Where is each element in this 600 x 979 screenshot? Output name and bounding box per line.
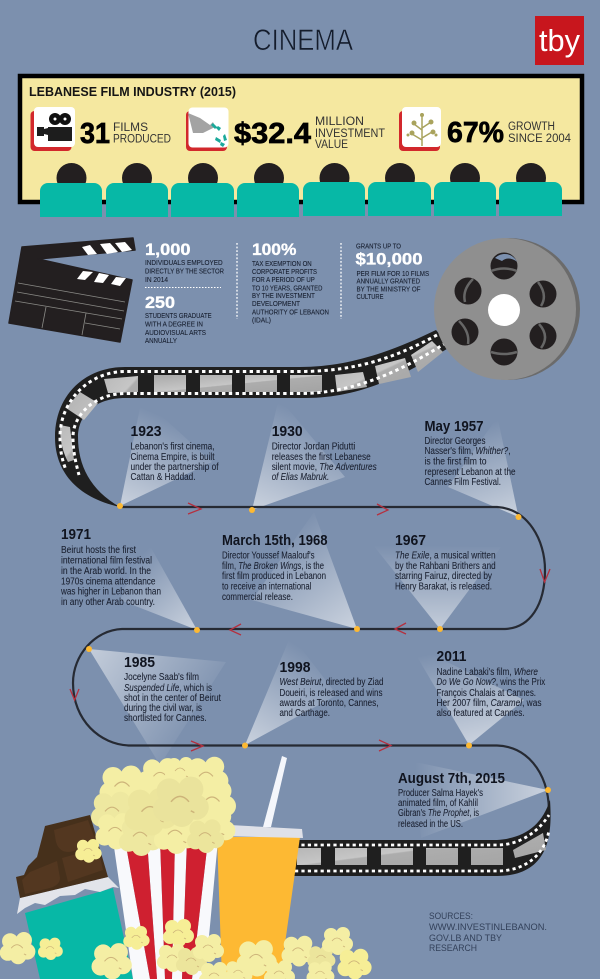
event: March 15th, 1968: commercial release. [222,592,293,603]
stat: 31 films produced: PRODUCED [113,134,171,146]
event: 2011: 2011 [436,648,466,665]
event: 1923: Cinema Empire, is built [130,452,215,463]
stat block: 100% tax exemption: TO 10 YEARS, GRANTED [252,284,322,292]
stat block: 100% tax exemption: TAX EXEMPTION ON [252,259,312,268]
event: 1971: in the Arab world. In the [61,566,151,577]
stat block: 100% tax exemption [252,240,329,324]
foil [17,877,119,914]
event: March 15th, 1968: to receive an international [222,582,312,592]
icon: popcorn box [113,840,218,979]
event: August 7th, 2015: animated film, of Kahlil [398,798,478,809]
film strip: upper [55,330,450,507]
chocolate [16,815,108,898]
event: 1923: Cattan & Haddad. [130,472,196,483]
icon: clapperboard [9,238,135,342]
stat block: 1,000 employed and 250 graduates: ANNUALLY [145,336,177,345]
event: 1930: 1930 [272,423,303,440]
screen heading: LEBANESE FILM INDUSTRY (2015) [29,85,236,99]
audience: heads and seats [40,163,562,217]
sources: SOURCES: [429,911,473,922]
event: May 1957: May 1957 [424,418,484,435]
stat block: 1,000 employed and 250 graduates: IN 2014 [145,275,168,284]
event: 1971: international film festival [61,556,152,566]
event: 1985 [124,654,221,724]
panel: cinema screen with film industry stats [20,76,582,217]
event: 1923: under the partnership of [130,462,219,473]
stat block: 1,000 employed and 250 graduates [145,240,224,345]
event: 1998: awards at Toronto, Cannes, [280,698,378,709]
event: March 15th, 1968: film, The Broken Wings, is the [222,561,324,572]
stat: 31 films produced: 31 [80,118,110,150]
stat block: 1,000 employed and 250 graduates: 250 [145,293,175,312]
event: 1971: 1970s cinema attendance [61,576,156,588]
event: 1985: Suspended Life, which is [124,683,212,694]
event: 1971: Beirut hosts the first [61,545,136,556]
event: 1998: West Beirut, directed by Ziad [280,677,384,688]
stat: $32.4 million investment value: INVESTMENT [315,128,385,140]
stat block: 1,000 employed and 250 graduates: AUDIOVISUAL ARTS [145,328,206,337]
stat block: 1,000 employed and 250 graduates: WITH A DEGREE IN [145,320,203,328]
event: 1967: The Exile, a musical written [395,550,496,562]
event: March 15th, 1968: March 15th, 1968 [222,532,328,549]
stat block: $10,000 grants: $10,000 [356,250,422,268]
stat block: $10,000 grants: GRANTS UP TO [356,242,401,250]
event: 1998: and Carthage. [280,708,330,719]
event: 1971 [60,526,161,608]
event: August 7th, 2015: released in the US. [398,819,463,830]
stat: $32.4 million investment value: $32.4 [234,118,311,150]
event: 1998 [280,659,384,719]
wrapper [25,888,133,979]
straw [263,756,287,827]
event: 2011: Nadine Labaki's film, Where [436,667,538,678]
stat block: 1,000 employed and 250 graduates: DIRECTLY BY THE SECTOR [145,266,224,276]
timeline dots [86,503,551,793]
stat: 67% growth since 2004: 67% [447,117,504,149]
sources [429,911,547,954]
event: March 15th, 1968 [222,532,328,603]
event: 1967 [395,532,496,592]
event: 1985: shortlisted for Cannes. [124,713,207,724]
event: May 1957: Nasser's film, Whither?, [424,446,510,457]
event: 1985: shot in the center of Beirut [124,693,221,704]
event: 1985: 1985 [124,654,155,671]
event: 2011 [436,648,545,719]
stat block: $10,000 grants [356,242,429,301]
event: 1923: Lebanon's first cinema, [130,442,214,452]
event: 1930: Director Jordan Pidutti [272,442,355,452]
stat: $32.4 million investment value: MILLION [315,116,364,128]
stat block: 100% tax exemption: AUTHORITY OF LEBANON [252,308,329,316]
icon: film reel [434,238,580,380]
event: 1930: releases the first Lebanese [272,452,371,463]
event: 1998: 1998 [280,659,310,676]
stat: $32.4 million investment value [234,116,385,151]
timeline arrows [70,503,550,751]
event: March 15th, 1968: first film produced in Lebanon [222,571,326,582]
event: May 1957 [424,418,516,488]
event: 1985: Jocelyne Saab's film [124,672,199,683]
icon: chocolate bar [16,815,133,979]
stat: 67% growth since 2004 [447,117,572,149]
event: 1923 [130,423,219,483]
event: August 7th, 2015: August 7th, 2015 [398,770,505,787]
stat: 31 films produced: FILMS [113,122,148,134]
stat block: 1,000 employed and 250 graduates: 1,000 [145,240,190,259]
stat block: 100% tax exemption: DEVELOPMENT [252,299,300,308]
event: May 1957: represent Lebanon at the [424,467,516,478]
stat: $32.4 million investment value: VALUE [315,139,348,151]
event: 2011: Her 2007 film, Caramel, was [436,698,542,709]
event: 1998: Doueiri, is released and wins [280,688,383,699]
sources: RESEARCH [429,943,477,954]
event: May 1957: is the first film to [424,456,487,468]
event: 1967: 1967 [395,532,426,549]
event: 1985: during the civil war, is [124,703,202,714]
screen frame [20,76,582,202]
stat: 67% growth since 2004: SINCE 2004 [508,133,572,145]
event: 1930: silent movie, The Adventures [272,462,377,473]
film strip: lower [290,800,551,876]
event: 1930 [272,423,377,483]
stat: 31 films produced [80,118,171,150]
stat block: $10,000 grants: PER FILM FOR 10 FILMS [356,269,429,278]
stat: 67% growth since 2004: GROWTH [508,121,555,133]
stat block: $10,000 grants: BY THE MINISTRY OF [356,284,421,294]
popcorn: overflowing pile [91,757,236,856]
stat block: 100% tax exemption: BY THE INVESTMENT [252,291,315,300]
event: 1930: of Elias Mabruk. [272,472,329,483]
stat block: 100% tax exemption: CORPORATE PROFITS [252,267,317,276]
stat block: 100% tax exemption: FOR A PERIOD OF UP [252,275,315,284]
sources: GOV.LB AND TBY [429,933,503,944]
icon: growing plant [399,107,441,151]
event: 2011: also featured at Cannes. [436,708,524,719]
event: August 7th, 2015: Gibran's The Prophet, is [398,808,479,819]
icon: soft drink cup [217,756,303,979]
stat block: 1,000 employed and 250 graduates: INDIVIDUALS EMPLOYED [145,258,223,267]
popcorn: scattered kernels [0,839,372,979]
projector light beams [89,398,548,838]
sources: WWW.INVESTINLEBANON. [429,922,547,933]
event: 1923: 1923 [130,423,162,440]
icon: film camera [30,107,75,151]
event: 1971: 1971 [61,526,91,543]
event: 2011: François Chalais at Cannes. [436,688,536,699]
logo: tby: tby [539,23,580,58]
event: 1967: Henry Barakat, is released. [395,582,492,592]
stat block: 100% tax exemption: 100% [252,240,296,259]
event: March 15th, 1968: Director Youssef Maalouf's [222,550,315,562]
stat block: 100% tax exemption: (IDAL) [252,316,271,324]
logo: tby [535,16,584,65]
icon: watering can [186,108,228,151]
stat block: $10,000 grants: CULTURE [356,292,384,301]
event: 1967: starring Fairuz, directed by [395,571,492,582]
stat block: 1,000 employed and 250 graduates: STUDENTS GRADUATE [145,311,212,320]
title: CINEMA [253,24,353,57]
stat block: $10,000 grants: ANNUALLY GRANTED [356,276,420,286]
event: 1967: by the Rahbani Brithers and [395,561,496,572]
event: 1971: in any other Arab country. [61,597,155,608]
event: 1971: was higher in Lebanon than [60,586,161,598]
timeline track [73,507,549,810]
event: 2011: Do We Go Now?, wins the Prix [436,677,545,688]
event: August 7th, 2015 [398,770,505,830]
event: August 7th, 2015: Producer Salma Hayek's [398,788,483,799]
event: May 1957: Director Georges [424,436,486,447]
event: May 1957: Cannes Film Festival. [424,477,501,488]
